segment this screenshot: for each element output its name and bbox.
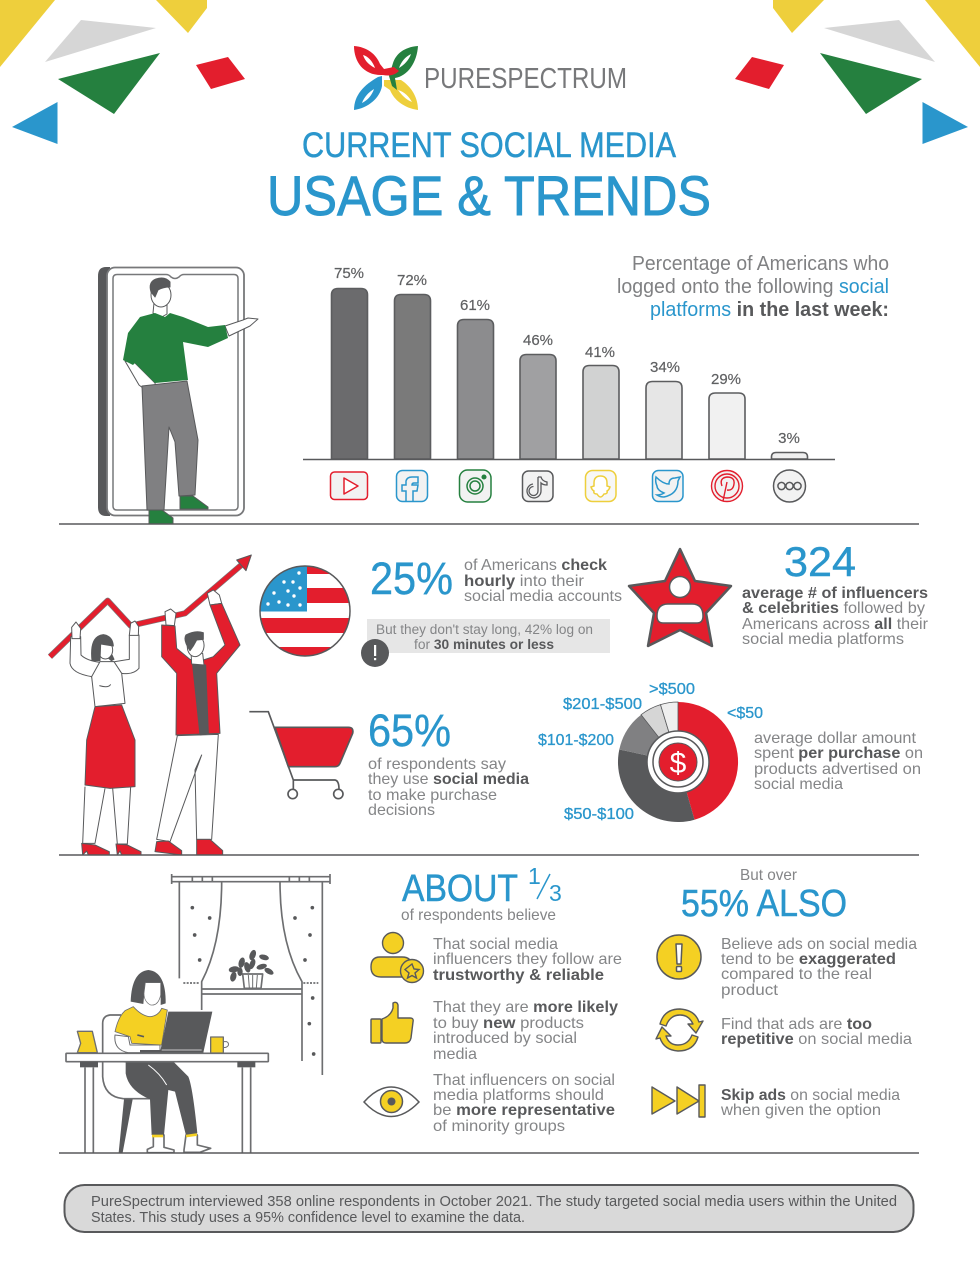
text: more likely: media: [433, 1046, 477, 1063]
icon: Pinterest: [712, 470, 742, 502]
chart caption: logged onto the following social: [617, 276, 889, 298]
stat: 324 influencers: & celebrities followed by: [742, 600, 925, 617]
stat: 25% check hourly: [370, 553, 622, 605]
plant: [228, 949, 275, 988]
bar: Other: [772, 452, 808, 459]
value labels: 34%: [650, 359, 680, 376]
text: more likely: That they are more likely: [433, 999, 618, 1016]
value labels: 3%: [778, 430, 800, 447]
donut labels: <$50: [727, 705, 763, 722]
value labels: [334, 265, 800, 447]
donut caption: spent per purchase on: [754, 745, 923, 762]
text: exaggerated: [721, 936, 917, 999]
donut labels: [538, 681, 763, 823]
decorative triangles top left: [0, 0, 245, 144]
desk: [66, 1053, 268, 1153]
bar: TikTok: [520, 354, 556, 459]
donut caption: products advertised on: [754, 761, 921, 778]
text: repetitive: [721, 1016, 912, 1048]
title: [267, 126, 711, 227]
icon: TikTok: [522, 471, 553, 502]
icon: trustworthy influencer: [371, 932, 424, 982]
footer note: States. This study uses a 95% confidence level to examine the data.: [91, 1210, 525, 1226]
logo: [354, 46, 627, 110]
text: representative: be more representative: [433, 1102, 615, 1119]
chart caption: [617, 253, 889, 321]
decorative triangles top right: [735, 0, 980, 144]
chart caption: platforms in the last week:: [650, 299, 889, 321]
text: representative: That influencers on social: [433, 1072, 615, 1089]
icon: American flag: [260, 566, 350, 656]
stat: 65% purchase decisions: of respondents say: [368, 756, 506, 773]
text: trustworthy: trustworthy & reliable: [433, 967, 604, 984]
icon: thumbs up: [371, 1002, 413, 1043]
title: CURRENT SOCIAL MEDIA: [302, 126, 677, 165]
value labels: 75%: [334, 265, 364, 282]
bar chart: platforms: [303, 265, 835, 460]
value labels: 29%: [711, 371, 741, 388]
donut labels: $101-$200: [538, 732, 614, 749]
icon: skip forward: [652, 1085, 705, 1117]
illustration: woman at desk by window: [66, 874, 330, 1153]
heading: about one third: of respondents believe: [401, 907, 556, 924]
icon: Facebook: [396, 470, 428, 502]
callout: 42% log on: But they don't stay long, 42% log on: [376, 622, 593, 637]
icon: other platforms: [774, 470, 806, 502]
bar: Instagram: [458, 320, 494, 459]
text: representative: of minority groups: [433, 1118, 565, 1135]
icon: alert: [361, 639, 389, 667]
icon: eye: [364, 1087, 419, 1116]
stat: 324 influencers: average # of influencers: [742, 585, 928, 602]
chart caption: Percentage of Americans who: [632, 253, 889, 275]
stat: 25% check hourly: 25%: [370, 553, 453, 604]
text: trustworthy: [433, 936, 622, 984]
value labels: 61%: [460, 297, 490, 314]
heading: 55% also: [681, 867, 847, 925]
title: USAGE & TRENDS: [267, 164, 711, 227]
value labels: 72%: [397, 272, 427, 289]
footer note: [64, 1185, 914, 1232]
footer note: PureSpectrum interviewed 358 online respondents in October 2021. The study targeted social media users within the United: [91, 1194, 897, 1210]
bar: Snapchat: [583, 366, 619, 459]
icon: Snapchat: [586, 470, 616, 502]
donut labels: $201-$500: [563, 696, 642, 713]
text: exaggerated: Believe ads on social media: [721, 936, 917, 953]
heading: about one third: ABOUT: [402, 868, 518, 910]
icon: influencer star: [629, 549, 731, 646]
text: more likely: [433, 999, 618, 1063]
donut chart: dollar amount per purchase: [538, 681, 763, 823]
donut caption: social media: [754, 776, 843, 793]
donut chart: dollar amount per purchase: $: [670, 747, 687, 780]
text: exaggerated: product: [721, 982, 779, 999]
text: representative: media platforms should: [433, 1087, 604, 1104]
photo frame: [77, 1031, 97, 1053]
woman: [70, 621, 141, 855]
chair: [103, 1015, 150, 1099]
stat: 25% check hourly: social media accounts: [464, 588, 622, 605]
bar: YouTube: [332, 288, 368, 459]
icon: exclamation: [657, 935, 701, 979]
text: exaggerated: tend to be exaggerated: [721, 951, 896, 968]
text: trustworthy: influencers they follow are: [433, 951, 622, 968]
text: more likely: to buy new products: [433, 1015, 584, 1032]
stat: 65% purchase decisions: [368, 705, 529, 819]
value labels: 46%: [523, 332, 553, 349]
stat: 324 influencers: [742, 538, 929, 648]
callout: 42% log on: for 30 minutes or less: [414, 637, 554, 652]
man: [155, 590, 240, 855]
donut labels: $50-$100: [564, 806, 634, 823]
text: skip ads: when given the option: [720, 1102, 881, 1119]
stat: 324 influencers: 324: [784, 538, 856, 585]
mug: [211, 1037, 223, 1053]
woman: [115, 970, 211, 1153]
text: skip ads: [720, 1087, 900, 1119]
donut caption: average dollar amount: [754, 730, 917, 747]
stat: 25% check hourly: of Americans check: [464, 557, 607, 574]
value labels: 41%: [585, 344, 615, 361]
text: representative: [433, 1072, 615, 1135]
stat: 324 influencers: social media platforms: [742, 631, 904, 648]
text: repetitive: Find that ads are too: [721, 1016, 872, 1033]
donut caption: [754, 730, 923, 793]
stat: 324 influencers: Americans across all their: [742, 616, 929, 633]
text: skip ads: Skip ads on social media: [721, 1087, 900, 1104]
illustration: man in phone: [98, 267, 258, 524]
heading: about one third: [401, 863, 562, 924]
heading: 55% also: But over: [740, 867, 798, 884]
icon: YouTube: [330, 472, 368, 500]
text: exaggerated: compared to the real: [721, 966, 872, 983]
logo: PURESPECTRUM: [424, 63, 627, 95]
text: repetitive: repetitive on social media: [721, 1031, 912, 1048]
donut labels: >$500: [649, 681, 695, 698]
icon: Twitter: [652, 470, 683, 502]
stat: 65% purchase decisions: to make purchase: [368, 787, 497, 804]
laptop: [160, 1012, 212, 1053]
icon: Instagram: [460, 470, 491, 502]
heading: about one third: 1: [528, 863, 541, 889]
window curtains: [172, 874, 330, 1075]
stat: 65% purchase decisions: 65%: [368, 705, 451, 756]
illustration: couple lifting rising arrow: [50, 555, 251, 855]
heading: about one third: 3: [549, 880, 562, 906]
icon: shopping cart: [249, 712, 353, 799]
stat: 65% purchase decisions: they use social media: [368, 771, 529, 788]
callout: 42% log on: [361, 619, 610, 667]
bar: Twitter: [646, 382, 682, 459]
text: trustworthy: That social media: [433, 936, 558, 953]
text: more likely: introduced by social: [433, 1030, 577, 1047]
stat: 65% purchase decisions: decisions: [368, 802, 435, 819]
icon: repeat arrows: [656, 1009, 703, 1051]
bar: Pinterest: [709, 393, 745, 459]
arrow line: [50, 555, 251, 657]
heading: 55% also: 55% ALSO: [681, 883, 847, 925]
bar: Facebook: [394, 294, 430, 459]
stat: 25% check hourly: hourly into their: [464, 573, 585, 590]
